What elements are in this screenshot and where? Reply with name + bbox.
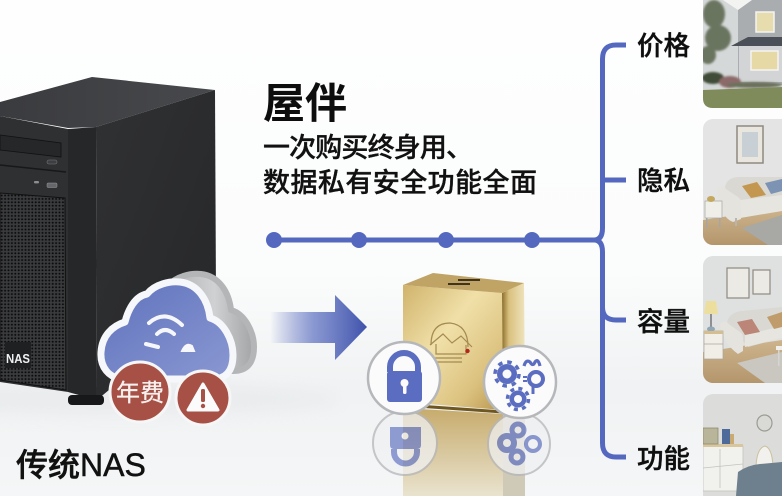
wifi symbol	[146, 316, 194, 351]
tree	[700, 0, 731, 64]
house logo	[428, 323, 472, 362]
blue-grey storage box	[736, 462, 782, 496]
cloud face	[101, 282, 233, 379]
red indicator	[465, 349, 470, 353]
shelf items	[703, 428, 734, 444]
rug	[742, 215, 782, 245]
front ports	[34, 181, 57, 188]
house wall	[738, 0, 782, 85]
lamp	[704, 301, 718, 332]
hedge	[702, 72, 782, 88]
label: traditional NAS: 传统NAS	[16, 447, 146, 483]
gear reflection	[488, 413, 550, 475]
warning badge	[176, 371, 230, 425]
drive bay	[0, 135, 66, 172]
traditional NAS server tower	[0, 77, 216, 405]
device side	[502, 283, 525, 410]
server front panel	[0, 116, 68, 392]
sofa	[725, 177, 782, 226]
feature labels: 功能	[637, 444, 690, 474]
porch	[739, 46, 782, 82]
photo: house	[700, 0, 782, 108]
NAS badge	[5, 342, 31, 368]
lawn	[703, 87, 782, 108]
server foot	[68, 395, 104, 405]
kettle	[756, 446, 773, 466]
annual fee badge	[110, 362, 170, 422]
mesh grille	[0, 193, 66, 390]
feature labels: 隐私	[637, 166, 690, 196]
device slots	[448, 280, 480, 284]
tagline	[263, 133, 537, 198]
table	[776, 346, 782, 366]
picture frames	[727, 268, 770, 298]
feature labels	[637, 31, 690, 474]
arrow	[270, 295, 367, 360]
wall mirror	[757, 415, 772, 431]
bottom gear	[508, 388, 528, 410]
lock reflection	[373, 411, 437, 475]
heading: Wuban: 屋伴	[263, 80, 347, 127]
feature labels: 容量	[637, 307, 690, 337]
photo: living room 2	[703, 256, 782, 383]
NAS badge: NAS	[6, 351, 30, 366]
annual fee badge: 年费	[116, 380, 164, 407]
gears and support icon	[484, 346, 556, 418]
server front corner strip	[68, 127, 97, 400]
porch roof	[731, 37, 782, 46]
server side panel	[96, 90, 216, 400]
cloud icon with warnings	[101, 274, 254, 425]
left gear	[495, 362, 519, 386]
rug	[737, 352, 782, 383]
feature labels: 价格	[637, 31, 690, 61]
photo: room with storage	[703, 394, 782, 496]
support head	[523, 361, 543, 394]
timeline connector	[266, 232, 598, 248]
gold device with reflection	[368, 273, 556, 496]
roof trim	[723, 0, 752, 10]
white cabinet	[703, 444, 743, 491]
lower window	[751, 51, 778, 70]
nightstand	[704, 331, 723, 359]
tagline: 一次购买终身用、	[263, 133, 473, 163]
device top	[403, 273, 524, 293]
lock icon	[368, 342, 440, 414]
framed picture	[737, 126, 763, 163]
upper window	[756, 12, 774, 32]
bracket to four features	[594, 45, 626, 457]
sofa	[727, 307, 782, 354]
tagline: 数据私有安全功能全面	[263, 168, 537, 198]
device reflection	[403, 405, 525, 496]
floor	[703, 340, 782, 383]
floor	[703, 208, 782, 245]
device front	[403, 285, 503, 410]
cloud metal backing	[122, 274, 254, 371]
photo: living room 1	[703, 119, 782, 245]
side table	[705, 196, 722, 228]
server top face	[0, 77, 215, 128]
